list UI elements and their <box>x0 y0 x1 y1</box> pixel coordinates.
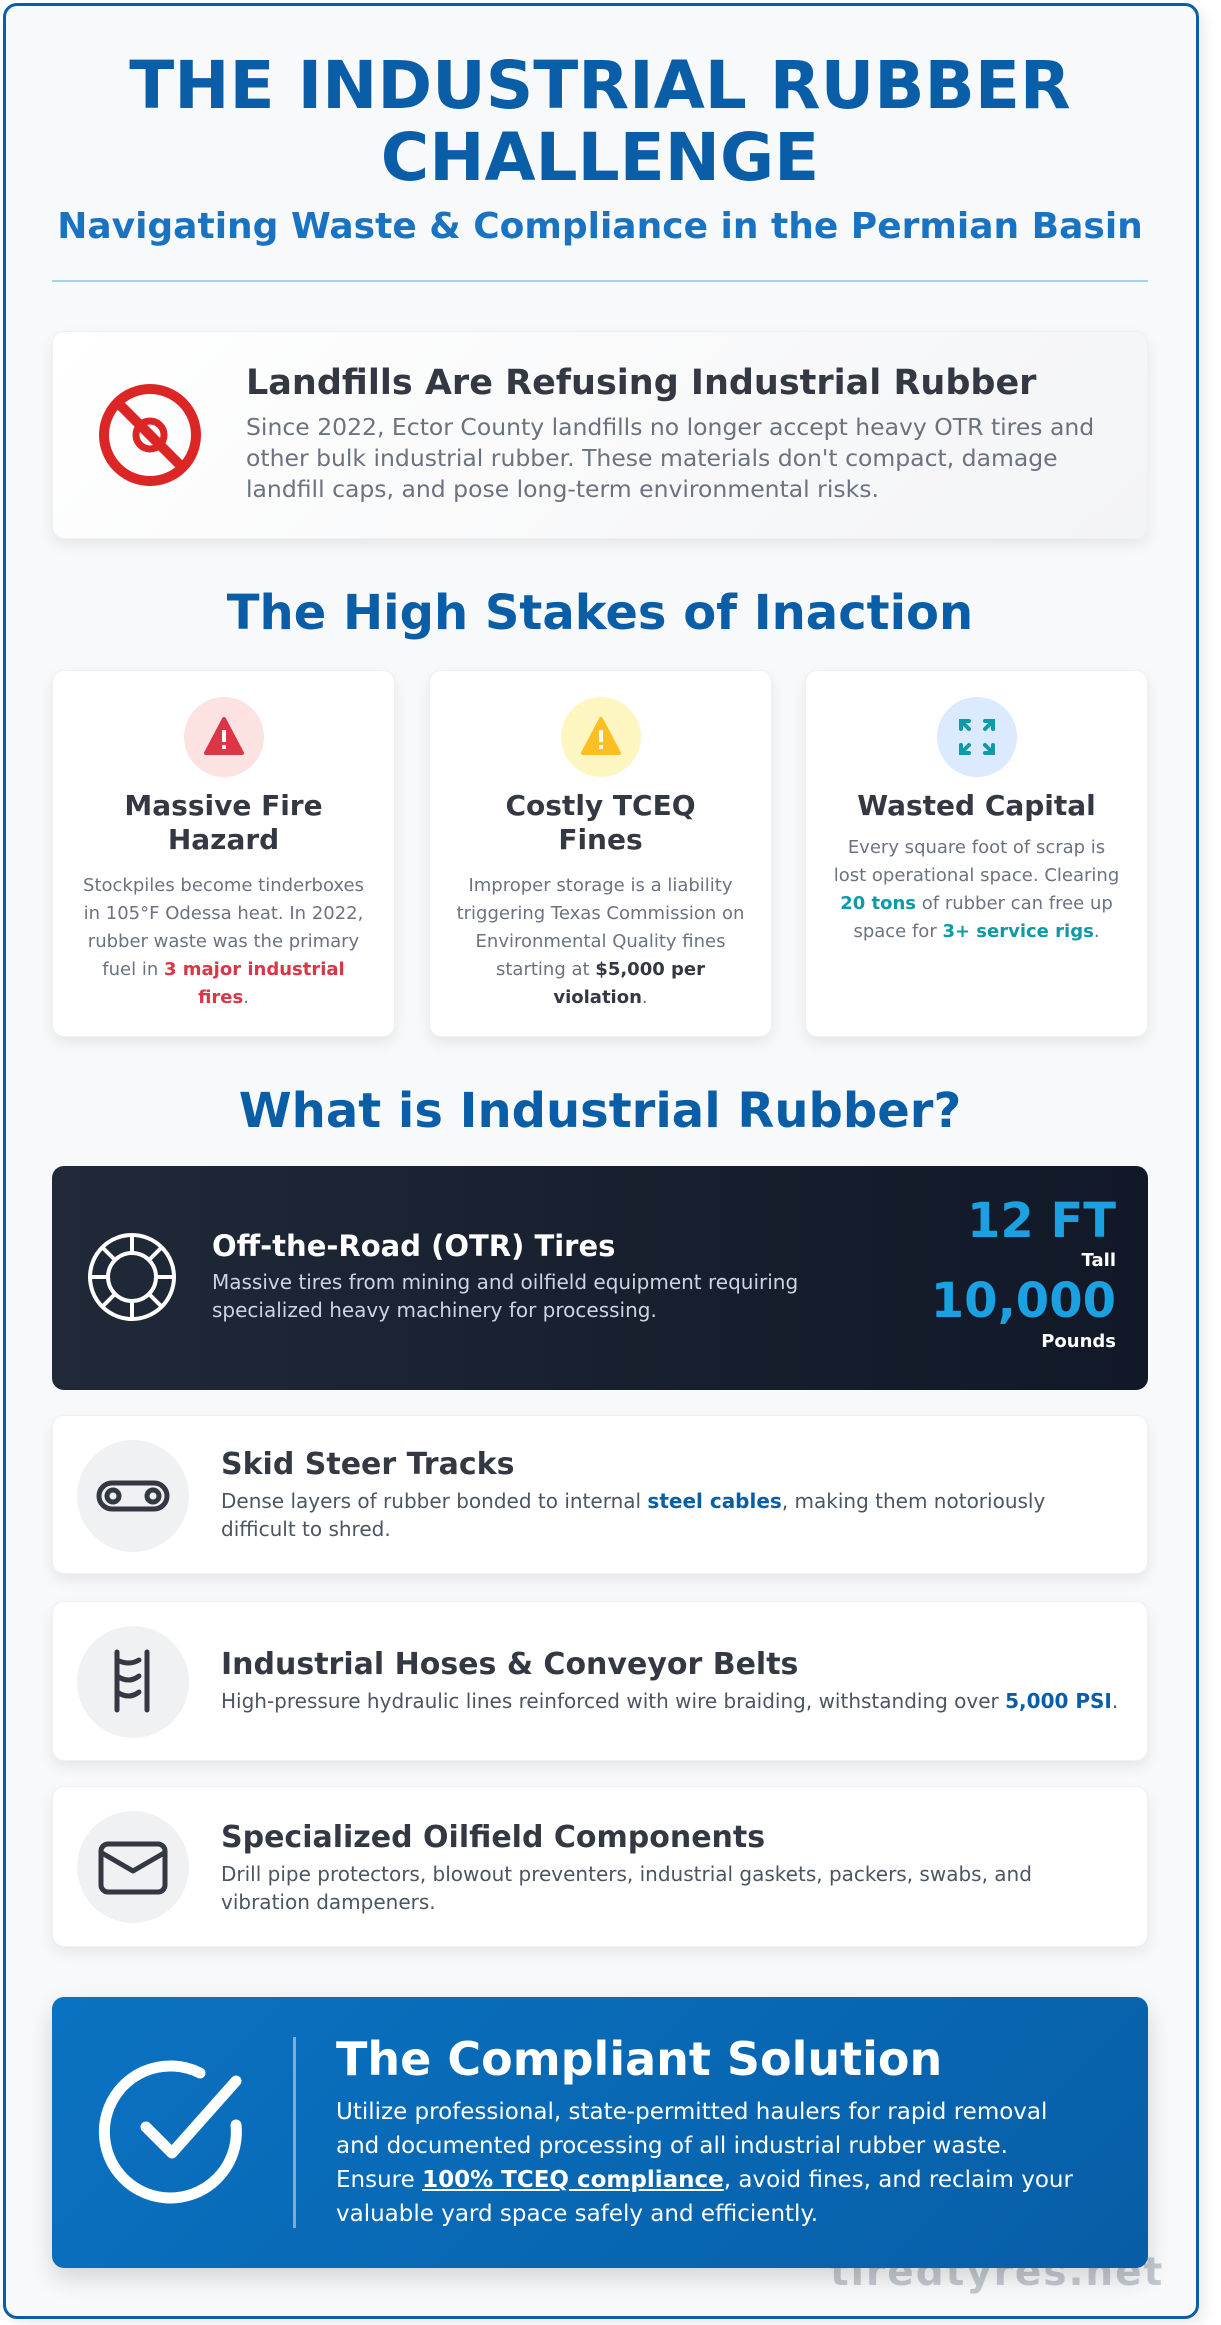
icon: component box <box>77 1811 189 1923</box>
heading: OTR: Off-the-Road (OTR) Tires <box>212 1229 615 1263</box>
text: solution body: Ensure 100% TCEQ compliance, avoid fines, and reclaim your <box>336 2167 1073 2193</box>
heading: landfills: Landfills Are Refusing Industrial Rubber <box>246 363 1036 403</box>
stats: Tall <box>1082 1250 1116 1271</box>
panel: wasted capital: Every square foot of scrap is lost operational space. Clearing 20 tons of rubber can free up space for 3+ service rigs. <box>834 837 1119 942</box>
panel: TCEQ fines: Costly TCEQ <box>505 789 696 822</box>
panel: wasted capital: Wasted Capital <box>857 789 1096 822</box>
panel: fire hazard: Massive Fire <box>124 789 323 822</box>
stats: 10,000 <box>931 1273 1116 1329</box>
subtitle: Navigating Waste & Compliance in the Permian Basin <box>57 206 1143 247</box>
panel: oilfield components <box>52 1786 1148 1947</box>
text: solution body: valuable yard space safely and efficiently. <box>336 2201 818 2227</box>
title: CHALLENGE <box>381 119 819 196</box>
panel: fire hazard: Hazard <box>168 823 279 856</box>
stats: Pounds <box>1041 1331 1116 1352</box>
icon: track <box>77 1440 189 1552</box>
panel: hoses: Industrial Hoses & Conveyor Belts <box>221 1647 798 1682</box>
panel: hoses <box>52 1601 1148 1761</box>
panel: skid steer: Dense layers of rubber bonded to internal steel cables, making them notoriously difficult to shred. <box>221 1489 1045 1541</box>
heading: what is industrial rubber: What is Industrial Rubber? <box>239 1083 961 1139</box>
text: landfills body: Since 2022, Ector County landfills no longer accept heavy OTR tires and other bulk industrial rubber. These materials don't compact, damage landfill caps, and pose long-term environmental risks. <box>246 413 1094 503</box>
panel: oilfield components: Drill pipe protectors, blowout preventers, industrial gaskets, packers, swabs, and vibration dampeners. <box>221 1862 1032 1914</box>
panel: skid steer <box>52 1415 1148 1574</box>
title <box>129 47 1071 196</box>
text: OTR body: Massive tires from mining and oilfield equipment requiring specialized heavy machinery for processing. <box>212 1270 798 1322</box>
icon: expand arrows <box>936 697 1016 777</box>
panel: fire hazard: Stockpiles become tinderboxes in 105°F Odessa heat. In 2022, rubber waste was the primary fuel in 3 major industrial fires. <box>83 875 364 1008</box>
panel: TCEQ fines: Fines <box>558 823 643 856</box>
panel: wasted capital <box>805 670 1148 1037</box>
panel: TCEQ fines: Improper storage is a liability triggering Texas Commission on Environmental Quality fines starting at $5,000 per violation. <box>457 875 744 1008</box>
icon: yellow warning <box>560 697 640 777</box>
panel: skid steer: Skid Steer Tracks <box>221 1447 514 1482</box>
icon: tire <box>88 1233 176 1321</box>
panel: fire hazard <box>52 670 395 1037</box>
panel: TCEQ fines <box>429 670 772 1037</box>
icon: prohibited <box>99 384 201 486</box>
text: solution body: Utilize professional, state-permitted haulers for rapid removal <box>336 2099 1047 2125</box>
heading: high stakes: The High Stakes of Inaction <box>227 585 973 641</box>
icon: check circle <box>98 2060 242 2204</box>
watermark: tiredtyres.net <box>830 2250 1164 2295</box>
icon: fire warning <box>184 697 264 777</box>
panel: oilfield components: Specialized Oilfield Components <box>221 1820 765 1855</box>
stats: 12 FT <box>967 1193 1116 1249</box>
heading: solution: The Compliant Solution <box>336 2032 942 2086</box>
stats <box>931 1193 1116 1352</box>
panel: landfills refusing <box>52 331 1148 539</box>
text: solution body <box>336 2099 1073 2227</box>
icon: hose <box>77 1626 189 1738</box>
text: solution body: and documented processing of all industrial rubber waste. <box>336 2133 1008 2159</box>
panel: compliant solution <box>52 1997 1148 2268</box>
panel: hoses: High-pressure hydraulic lines reinforced with wire braiding, withstanding over 5,000 PSI. <box>221 1689 1118 1713</box>
title: THE INDUSTRIAL RUBBER <box>129 47 1071 124</box>
panel: OTR tires <box>52 1166 1148 1390</box>
